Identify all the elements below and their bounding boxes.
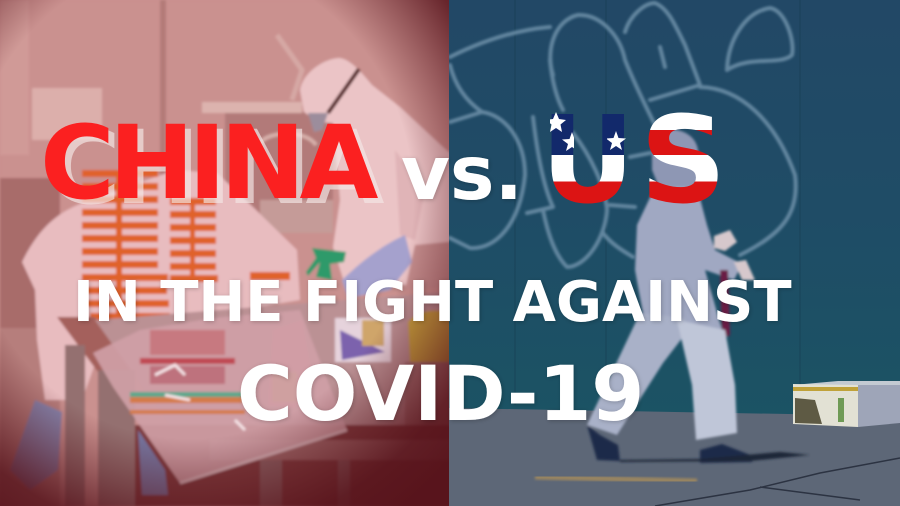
dark red vignette [0,0,449,506]
title word: US with flag fill [541,91,726,231]
pavement [449,408,900,506]
pavement markings and cracks [535,458,900,506]
trouser stripe [720,270,730,340]
blue wall [465,387,793,414]
back machine [224,112,334,212]
goggle strap [328,69,359,113]
wall tube [277,35,302,100]
walking person in protective suit [587,129,810,463]
cardboard box [793,381,900,427]
table top [56,316,112,372]
pink bottle [268,320,312,408]
orange tube rack right [170,198,290,283]
plastic bag with sample tubes [93,310,347,483]
panel: China lab photo with red tint [0,0,470,506]
yellow container [407,310,449,363]
lower cabinet shadow [135,425,470,506]
wall cabinet [2,20,27,153]
orange tube rack left [82,170,170,320]
photo base colour [0,0,449,506]
blue shoe covers [10,400,62,490]
lower left wall [0,178,60,328]
lab wall [81,68,360,280]
white package [335,318,391,362]
CHINA red text: CHINA [40,104,379,223]
torso and arm [635,187,742,330]
worker face shield [308,113,328,132]
letter U: U [541,91,635,231]
letter S: S [640,92,726,231]
right leg [677,320,737,440]
hood [652,129,699,190]
title word: vs.: vs. [401,129,523,217]
rear worker in protective suit [22,170,300,400]
gloves [714,230,737,251]
subtitle: COVID-19: COVID-19 [237,349,644,438]
wall pipe [160,0,166,180]
wall seams [515,0,800,410]
table legs [65,345,85,506]
wall paper sheet [32,88,102,140]
ground shadow [620,452,810,462]
panel: US street photo with blue tint [449,0,900,506]
flag stars [546,112,626,151]
CHINA pale shadow: CHINA [46,109,385,228]
left leg [587,313,685,435]
green spray bottle [306,248,346,280]
title word: CHINA [40,104,385,228]
shoes [587,425,620,461]
front worker in protective suit [298,56,449,286]
blue glove [342,235,412,298]
graffiti outlines [450,3,796,267]
subtitle: in the fight against: IN THE FIGHT AGAINST [73,270,792,335]
